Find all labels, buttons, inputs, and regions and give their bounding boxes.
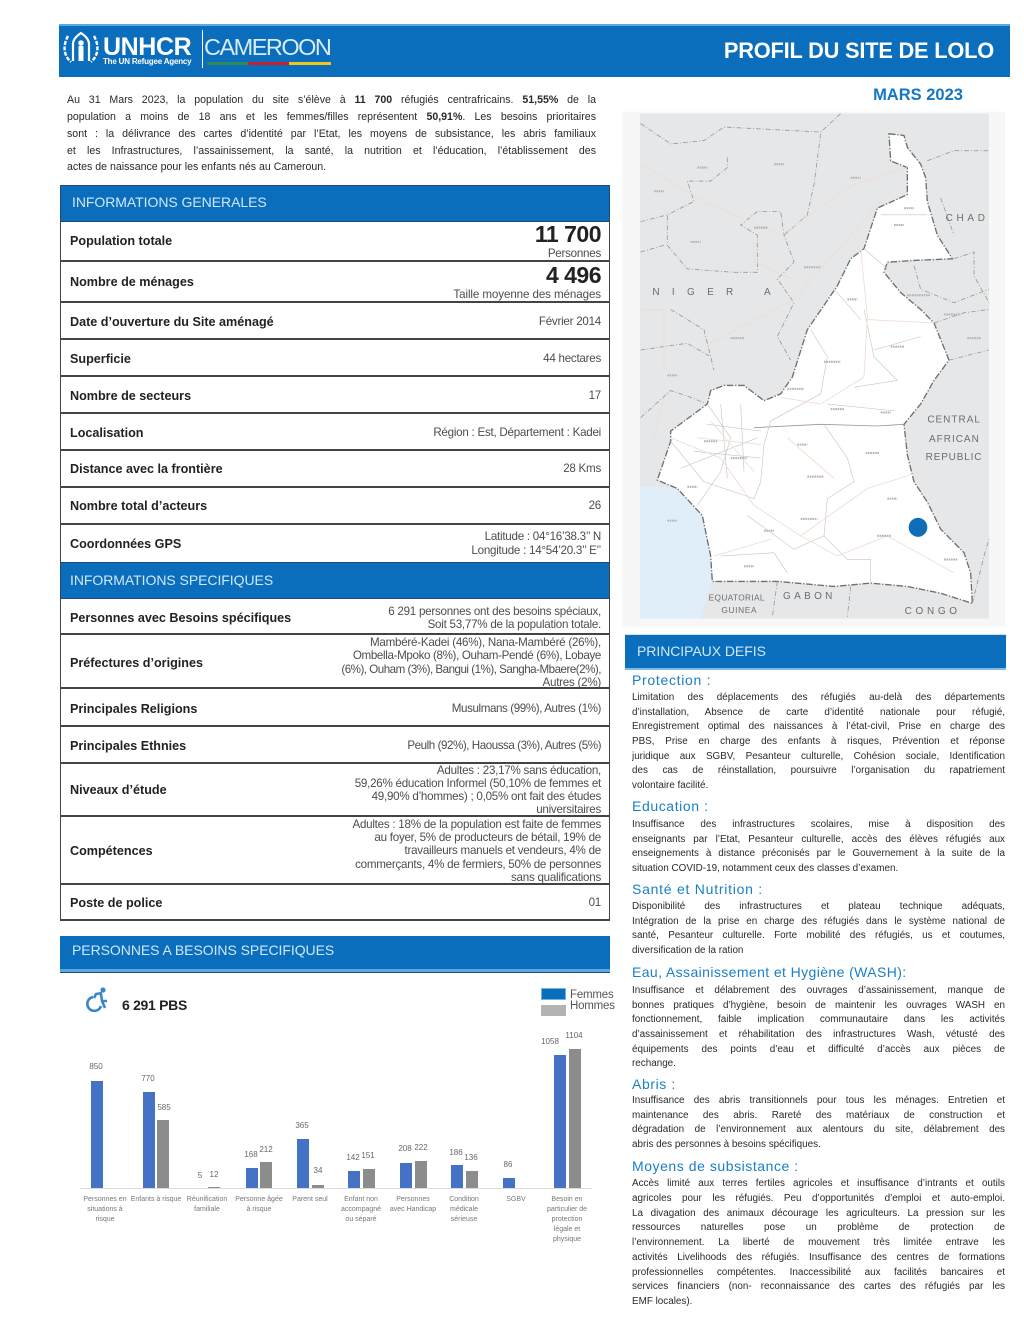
panel: informations generales heading <box>60 185 610 222</box>
chart legend: Femmes <box>570 989 614 1001</box>
panel: map of Cameroon: CENTRAL <box>927 414 981 425</box>
row: competences: commerçants, 4% de fermiers, 50% de personnes <box>355 858 601 871</box>
panel: personnes a besoins specifiques heading: PERSONNES A BESOINS SPECIFIQUES <box>72 942 334 958</box>
text: sante et nutrition: santé, Pesanteur culturelle. Forte mobilité des réfugiés, us et coutumes, <box>632 930 1005 941</box>
row: localisation <box>60 414 610 451</box>
bar chart: 585 <box>157 1103 171 1112</box>
heading: sante et nutrition: Santé et Nutrition : <box>632 881 763 897</box>
bar chart: Personnes en <box>83 1196 127 1203</box>
row: niveaux d'etude: Niveaux d’étude <box>70 783 167 797</box>
bar chart: particulier de <box>547 1206 587 1213</box>
bar chart: Enfants à risque <box>131 1196 181 1203</box>
bar chart: 136 <box>464 1153 478 1162</box>
heading: WASH: Eau, Assainissement et Hygiène (WASH): <box>632 964 907 980</box>
row: competences: Compétences <box>70 844 153 858</box>
heading: moyens de subsistance: Moyens de subsistance : <box>632 1158 799 1174</box>
row: nombre total d'acteurs: 26 <box>589 499 601 512</box>
row: coordonnees GPS: Latitude : 04°16’38.3’’ N <box>485 530 601 543</box>
header banner <box>59 24 1010 77</box>
text: education: situation COVID-19, notamment ceux des classes d’examen. <box>632 863 898 874</box>
bar chart: Condition <box>449 1196 479 1203</box>
text: WASH: équipements des points d’eau et difficulté d’accès aux pièces de <box>632 1044 1005 1055</box>
row: prefectures d'origines: Ombella-Mpoko (8%), Ouham-Pendé (6%), Lobaye <box>353 649 601 662</box>
row: niveaux d'etude: 49,90% d’hommes) ; 0,05% ont fait des études <box>372 790 601 803</box>
bar chart: 12 <box>210 1170 218 1179</box>
text: moyens de subsistance: l’environnement. La liberté de mouvement très limitée entrave les <box>632 1237 1005 1248</box>
row: principales ethnies: Peulh (92%), Haoussa (3%), Autres (5%) <box>407 739 601 752</box>
bar chart: médicale <box>450 1206 478 1213</box>
text: abris: maintenance des abris. Rareté des matériaux de construction et <box>632 1110 1005 1121</box>
panel: principaux defis heading <box>625 634 1006 670</box>
text: moyens de subsistance: La divagation des animaux décourage les agriculteurs. La pression sur les <box>632 1208 1005 1218</box>
bar chart <box>80 1031 592 1243</box>
row: distance frontiere <box>60 451 610 488</box>
row: competences: travailleurs manuels et vendeurs, 4% de <box>405 844 601 857</box>
Cameroon wordmark: CAMEROON <box>204 34 330 60</box>
panel: map of Cameroon: EQUATORIAL <box>709 593 765 603</box>
row: poste de police: 01 <box>589 896 601 909</box>
bar chart: accompagné <box>341 1206 381 1213</box>
text: education: enseignants par l’Etat, Pesanteur culturelle, accès des élèves réfugiés aux <box>632 834 1005 845</box>
row: nombre de secteurs <box>60 377 610 414</box>
bar chart: Personne âgée <box>235 1196 283 1203</box>
UNHCR tagline: The UN Refugee Agency <box>103 57 191 66</box>
bar chart: 222 <box>414 1143 428 1152</box>
panel: map of Cameroon: A <box>764 287 771 298</box>
row: competences: au foyer, 5% de producteurs de bétail, 19% de <box>374 831 601 844</box>
bar chart: 1058 <box>541 1037 559 1046</box>
bar chart: légale et <box>554 1226 580 1233</box>
bar chart: risque <box>95 1216 115 1223</box>
row: population totale: 11 700 <box>535 221 601 247</box>
text: sante et nutrition <box>632 901 1005 956</box>
chart legend <box>541 988 615 1016</box>
text: moyens de subsistance: Accès limité aux terres fertiles agricoles et insuffisance d’intrants et outils <box>632 1178 1005 1189</box>
heading: education: Education : <box>632 798 709 814</box>
row: superficie <box>60 340 610 377</box>
panel: personnes a besoins specifiques heading <box>60 936 610 972</box>
bar chart: 1104 <box>565 1031 583 1040</box>
bar chart: sérieuse <box>451 1216 477 1223</box>
row: date d'ouverture <box>60 303 610 340</box>
text: moyens de subsistance: professionnelles compétentes. Inaccessibilité aux facilités bancaires et <box>632 1266 1005 1278</box>
panel: map of Cameroon: GUINEA <box>721 605 757 615</box>
bar chart: 168 <box>244 1150 258 1159</box>
panel: principaux defis heading: PRINCIPAUX DEFIS <box>637 643 766 659</box>
row: nombre de menages: Nombre de ménages <box>70 274 194 288</box>
bar chart: Besoin en <box>551 1196 583 1203</box>
row: nombre de menages <box>60 262 610 303</box>
text: abris: Insuffisance des abris transitionnels pour tous les ménages. Entretien et <box>632 1095 1005 1106</box>
row: coordonnees GPS: Longitude : 14°54’20.3’’ E’’ <box>471 544 601 556</box>
panel: informations specifiques heading: INFORMATIONS SPECIFIQUES <box>70 572 273 588</box>
bar chart: 212 <box>259 1145 273 1154</box>
bar chart: Personnes <box>396 1196 430 1203</box>
panel: informations specifiques heading <box>60 562 610 599</box>
text: education <box>632 819 1005 874</box>
row: localisation: Région : Est, Département : Kadei <box>433 426 601 439</box>
row: niveaux d'etude: universitaires <box>536 803 601 816</box>
bar chart: 365 <box>295 1121 309 1130</box>
text: abris: abris des personnes à besoins spécifiques. <box>632 1139 821 1150</box>
intro paragraph: et les Infrastructures, l’assainissement, la santé, la nutrition et l’éducation, l’établissement des <box>67 145 596 157</box>
row: nombre de secteurs: Nombre de secteurs <box>70 388 191 402</box>
text: moyens de subsistance: agricoles pour les réfugiés. Peu d’opportunités d’emploi et auto-emploi. <box>632 1193 1005 1204</box>
row: prefectures d'origines: (6%), Ouham (3%), Bangui (1%), Sangha-Mbaere(2%), <box>341 662 601 676</box>
row: personnes avec besoins specifiques <box>60 599 610 635</box>
text: moyens de subsistance: ressources naturelles pose un problème de protection de <box>632 1222 1005 1233</box>
text: protection: juridique aux SGBV, Pesanteur culturelle, Cohésion sociale, Identification <box>632 751 1005 762</box>
text: protection <box>632 692 1005 791</box>
row: date d'ouverture: Février 2014 <box>539 315 601 328</box>
icon: UNHCR emblem <box>63 32 99 63</box>
row: personnes avec besoins specifiques: 6 291 personnes ont des besoins spéciaux, <box>388 605 601 618</box>
bar chart: 5 <box>198 1171 202 1180</box>
text: sante et nutrition: diversification de la ration <box>632 945 743 956</box>
row: date d'ouverture: Date d’ouverture du Site aménagé <box>70 314 274 328</box>
row: coordonnees GPS: Coordonnées GPS <box>70 536 181 550</box>
text: protection: d’installation, Absence de carte d’identité nationale pour réfugié, <box>632 707 1005 718</box>
intro paragraph: population a moins de 18 ans et les femmes/filles représentent 50,91%. Les besoins prioritaires <box>67 111 596 123</box>
logo divider <box>202 30 203 68</box>
tricolour flag line <box>207 62 331 65</box>
row: poste de police: Poste de police <box>70 896 162 910</box>
row: nombre de secteurs: 17 <box>589 389 601 402</box>
text: protection: PBS, Prise en charge des enfants à risques, Prévention et réponse <box>632 736 1005 747</box>
row: principales religions <box>60 689 610 727</box>
text: moyens de subsistance <box>632 1178 1005 1307</box>
bar chart: protection <box>552 1216 582 1223</box>
text: sante et nutrition: Disponibilité des infrastructures et plateau technique adéquats, <box>632 901 1005 912</box>
row: distance frontiere: Distance avec la frontière <box>70 462 223 476</box>
row: personnes avec besoins specifiques: Soit 53,77% de la population totale. <box>428 618 601 631</box>
row: principales ethnies: Principales Ethnies <box>70 738 186 752</box>
row: competences <box>60 817 610 885</box>
icon: wheelchair <box>86 987 107 1012</box>
bar chart: Parent seul <box>292 1196 328 1203</box>
row: nombre de menages: Taille moyenne des ménages <box>453 288 601 301</box>
intro paragraph: Au 31 Mars 2023, la population du site s’élève à 11 700 réfugiés centrafricains. 51,55% de la <box>67 94 596 106</box>
row: prefectures d'origines: Autres (2%) <box>543 676 601 689</box>
text: protection: Limitation des déplacements des réfugiés au-delà des départements <box>632 692 1005 703</box>
PBS total: 6 291 PBS <box>122 997 187 1013</box>
row: prefectures d'origines: Préfectures d’origines <box>70 656 203 670</box>
row: niveaux d'etude <box>60 764 610 817</box>
text: protection: volontaire facilité. <box>632 780 708 791</box>
text: WASH: rechange. <box>632 1058 676 1069</box>
intro paragraph: actes de naissance pour les enfants nés au Cameroun. <box>67 161 326 173</box>
intro paragraph <box>67 94 596 173</box>
bar chart: avec Handicap <box>390 1206 436 1213</box>
heading: abris: Abris : <box>632 1076 676 1092</box>
bar chart: 770 <box>141 1074 155 1083</box>
row: principales religions: Principales Religions <box>70 702 197 716</box>
text: WASH: d’assainissement et réhabilitation des infrastructures Wash, vétusté des <box>632 1029 1005 1040</box>
row: nombre total d'acteurs <box>60 488 610 525</box>
row: niveaux d'etude: 59,26% éducation Informel (50,10% de femmes et <box>355 777 601 790</box>
panel: map of Cameroon: REPUBLIC <box>926 452 982 463</box>
text: protection: Enregistrement optimal des naissances à l’état-civil, Prise en charge des <box>632 721 1005 732</box>
text: sante et nutrition: Intégration de la prise en charge des réfugiés dans le système national de <box>632 916 1005 927</box>
heading: protection: Protection : <box>632 672 711 688</box>
row: nombre total d'acteurs: Nombre total d’acteurs <box>70 498 207 512</box>
row: superficie: Superficie <box>70 352 131 366</box>
bar chart: SGBV <box>506 1196 526 1203</box>
row: principales ethnies <box>60 727 610 764</box>
row: population totale: Population totale <box>70 234 172 248</box>
panel: map of Cameroon: CONGO <box>905 606 961 617</box>
date: MARS 2023 <box>873 86 963 104</box>
text: moyens de subsistance: EMF locales). <box>632 1296 692 1307</box>
text: education: enseignements à distance préconisés par le Gouvernement à la suite de la <box>632 848 1005 859</box>
chart legend: Hommes <box>570 1000 615 1012</box>
bar chart: 850 <box>89 1062 103 1071</box>
bar chart: à risque <box>247 1206 271 1213</box>
text: abris <box>632 1095 1005 1150</box>
text: WASH: Insuffisance et délabrement des ouvrages d’assainissement, manque de <box>632 985 1005 996</box>
panel: map of Cameroon: CHAD <box>946 213 989 224</box>
text: education: Insuffisance des infrastructures scolaires, mise à disposition des <box>632 819 1005 830</box>
bar chart: ou séparé <box>345 1216 377 1223</box>
row: population totale <box>60 222 610 262</box>
bar chart: Enfant non <box>344 1196 378 1203</box>
row: competences: sans qualifications <box>511 871 601 884</box>
bar chart: 208 <box>398 1144 412 1153</box>
bar chart: 151 <box>361 1151 375 1160</box>
row: principales religions: Musulmans (99%), Autres (1%) <box>452 702 601 715</box>
bar chart: 86 <box>504 1160 512 1169</box>
bar chart: physique <box>553 1236 581 1243</box>
panel: map of Cameroon <box>640 113 990 619</box>
bar chart: Réunification <box>187 1196 227 1203</box>
bar chart: 34 <box>314 1166 322 1175</box>
text: moyens de subsistance: services financiers (non- reconnaissance des cartes des réfugiés par les <box>632 1281 1005 1292</box>
text: protection: des cas de réinstallation, poursuivre l’organisation du rapatriement <box>632 765 1005 776</box>
row: coordonnees GPS <box>60 525 610 562</box>
text: WASH: fonctionnement, faible implication communautaire dans les activités <box>632 1014 1005 1025</box>
intro paragraph: sont : la délivrance des cartes d’identité par l’Etat, les moyens de subsistance, les abris familiaux <box>67 128 596 140</box>
text: WASH <box>632 985 1005 1069</box>
row: population totale: Personnes <box>548 247 601 260</box>
panel: map of Cameroon: GABON <box>783 591 836 602</box>
bar chart: familiale <box>194 1206 220 1213</box>
row: poste de police <box>60 885 610 921</box>
bar chart: situations à <box>87 1206 123 1213</box>
row: personnes avec besoins specifiques: Personnes avec Besoins spécifiques <box>70 611 291 625</box>
row: distance frontiere: 28 Kms <box>563 462 601 475</box>
panel: map of Cameroon: NIGER <box>652 287 746 298</box>
panel: map of Cameroon: AFRICAN <box>929 434 980 445</box>
row: superficie: 44 hectares <box>543 352 601 365</box>
UNHCR wordmark: UNHCR <box>103 33 191 61</box>
document title: PROFIL DU SITE DE LOLO <box>724 38 994 63</box>
row: niveaux d'etude: Adultes : 23,17% sans éducation, <box>437 764 601 777</box>
text: abris: dégradation de l’environnement aux alentours du site, délabrement des <box>632 1124 1005 1135</box>
text: moyens de subsistance: activités Livelihoods des réfugiés. Insuffisance des centres de formations <box>632 1252 1005 1263</box>
text: WASH: bonnes pratiques d’hygiène, besoin de maintenir les ouvrages WASH en <box>632 1000 1005 1011</box>
row: competences: Adultes : 18% de la population est faite de femmes <box>352 818 601 831</box>
row: localisation: Localisation <box>70 426 143 440</box>
panel: informations generales heading: INFORMATIONS GENERALES <box>72 194 267 210</box>
row: prefectures d'origines: Mambéré-Kadei (46%), Nana-Mambéré (26%), <box>370 636 601 649</box>
bar chart: 142 <box>346 1153 360 1162</box>
row: nombre de menages: 4 496 <box>546 262 601 288</box>
bar chart: 186 <box>449 1148 463 1157</box>
row: prefectures d'origines <box>60 635 610 689</box>
